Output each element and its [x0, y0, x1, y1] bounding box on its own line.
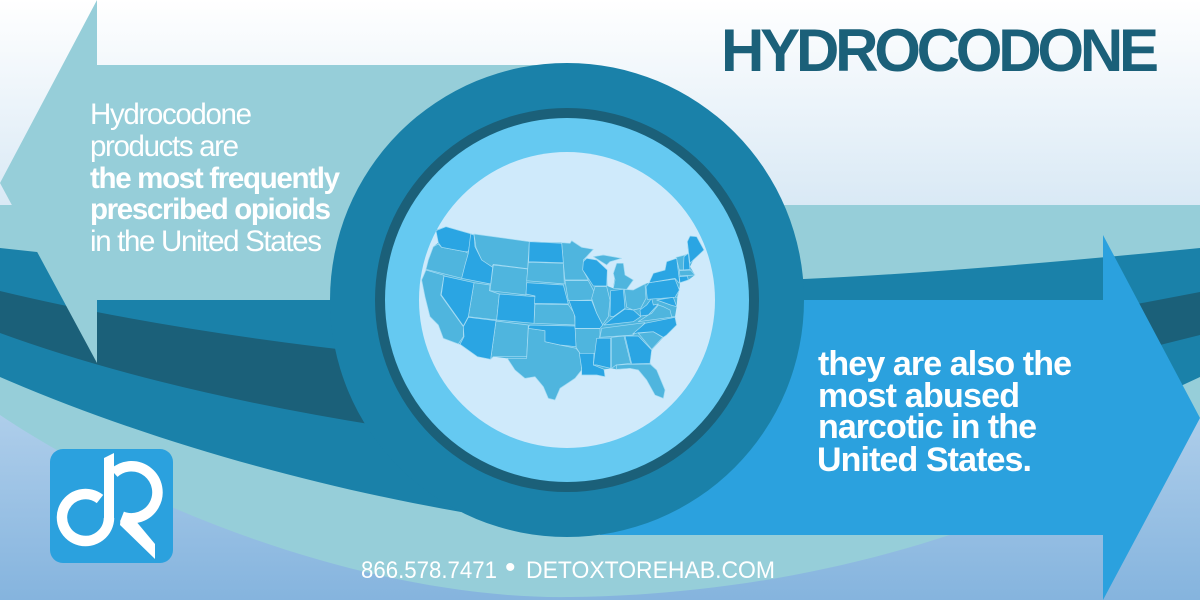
darker band, right portion — [1100, 292, 1200, 360]
logo: dR — [50, 449, 173, 563]
darker band, left portion — [0, 291, 420, 432]
right arrow text block: most abused — [818, 377, 1020, 415]
left arrow text block: products are — [90, 130, 239, 163]
right arrow text block: United States. — [817, 441, 1032, 479]
light teal sweeping band — [0, 205, 1200, 597]
contact line: DETOXTOREHAB.COM — [526, 557, 775, 584]
right arrow text block: they are also the — [818, 345, 1072, 383]
left arrow text block — [90, 98, 341, 258]
left arrow text block: the most frequently — [90, 162, 341, 195]
dark blue sweeping band — [0, 248, 1200, 512]
map of the United States — [422, 227, 704, 400]
title: HYDROCODONE — [721, 17, 1159, 84]
left arrow text block: prescribed opioids — [90, 193, 331, 226]
central circle badge — [330, 63, 804, 537]
right arrow text block — [817, 345, 1072, 479]
left arrow — [0, 0, 567, 363]
contact line: • — [505, 551, 516, 584]
left arrow text block: Hydrocodone — [90, 98, 252, 131]
contact line: 866.578.7471 — [361, 557, 497, 584]
right arrow — [600, 235, 1200, 600]
right arrow text block: narcotic in the — [818, 408, 1037, 446]
contact line — [361, 551, 775, 584]
left arrow text block: in the United States — [90, 225, 322, 258]
